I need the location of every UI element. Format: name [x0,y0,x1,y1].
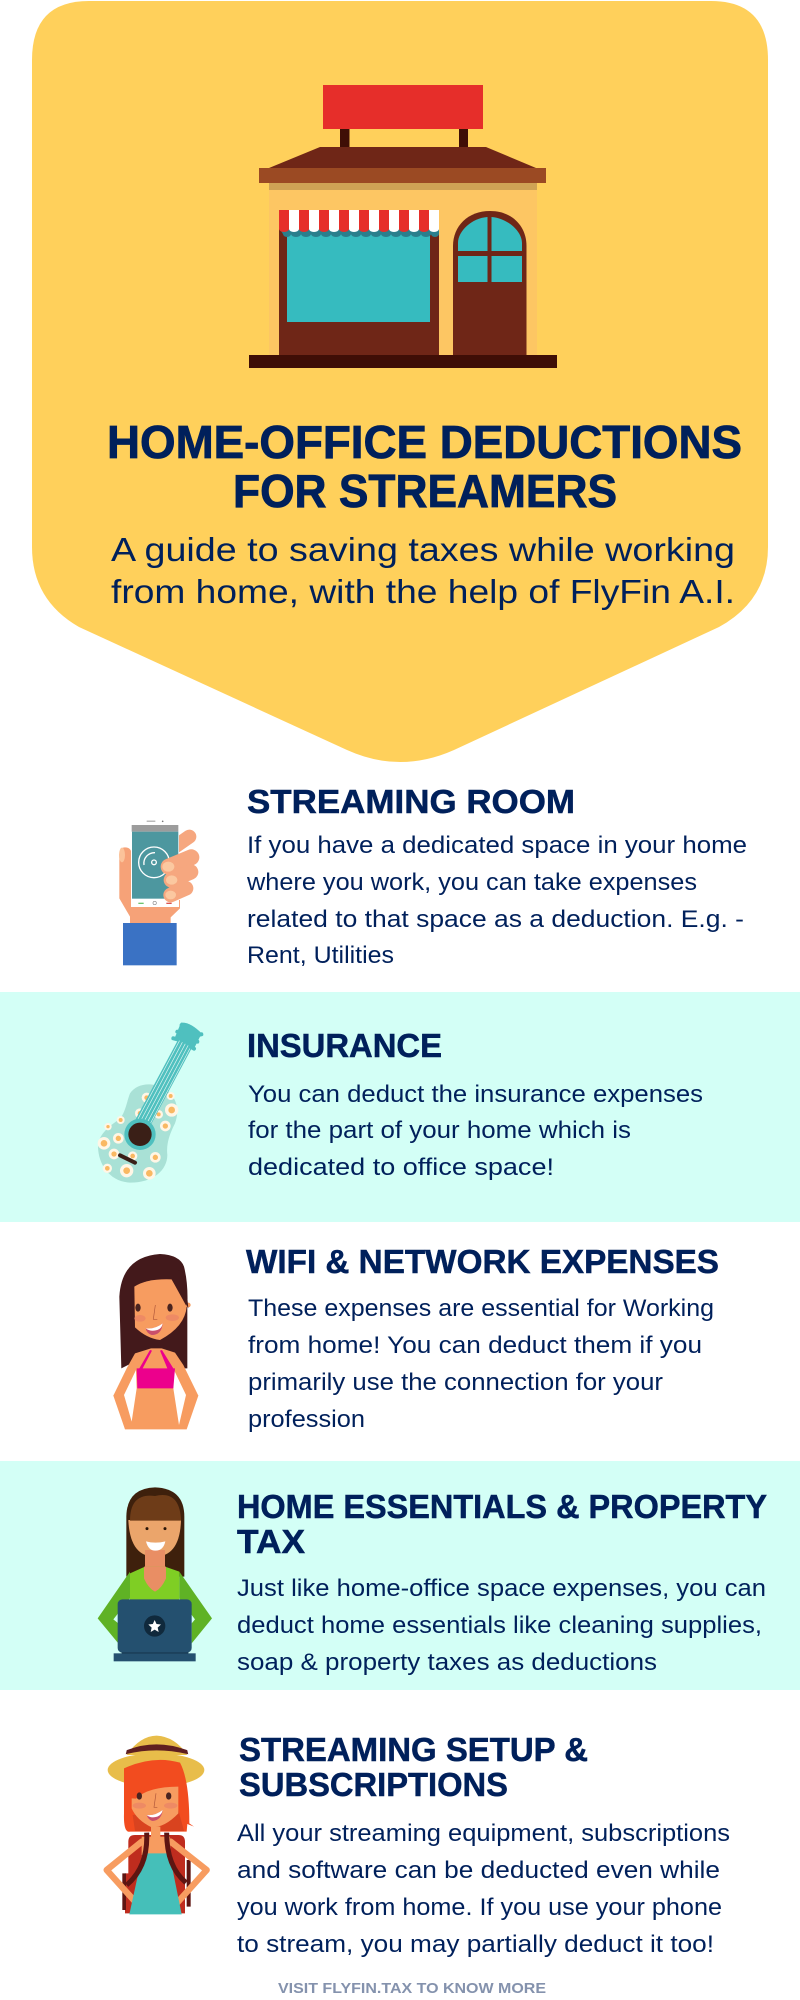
guitar body [98,1084,177,1183]
sound hole [124,1119,156,1150]
heading: home essentials [237,1488,767,1560]
ear [186,1303,191,1307]
text: wifi: from home! You can deduct them if you [248,1332,702,1359]
phone [131,818,179,907]
text: insurance [248,1081,703,1181]
heading: streaming setup [239,1731,588,1803]
window glass [287,232,430,322]
face [134,1279,187,1340]
panel: insurance band [0,992,800,1222]
icon: woman with hat and backpack [107,1736,207,1914]
hair back [126,1487,184,1577]
text: home essentials: deduct home essentials like cleaning supplies, [237,1612,762,1639]
face [128,1520,181,1557]
tuners [173,1025,201,1049]
text: streaming room [246,832,747,969]
heading: streaming setup: SUBSCRIPTIONS [239,1766,508,1803]
headstock [175,1023,202,1049]
sign posts [340,129,468,147]
text: streaming setup: All your streaming equipment, subscriptions [237,1820,730,1847]
pink top [137,1350,175,1388]
arm gaps [124,1370,186,1425]
sleeves [98,1572,212,1643]
strings [136,1036,193,1128]
text: streaming setup: you work from home. If you use your phone [237,1894,722,1921]
awning [279,210,439,237]
icon: woman in pink top [113,1254,198,1429]
far finger [175,837,189,847]
facial features [133,1792,177,1821]
hand [119,847,180,924]
subtitle [111,531,735,610]
backpack [125,1835,185,1913]
shirt [130,1567,179,1602]
neck [151,1827,160,1857]
flowers [98,1092,178,1180]
sleeve [123,923,177,965]
shoulders and arms [107,1842,207,1903]
wall shadow [269,183,537,190]
roof [269,147,536,168]
straps [127,1833,186,1885]
face [132,1787,178,1827]
text: home essentials [237,1575,766,1676]
footer: VISIT FLYFIN.TAX TO KNOW MORE [278,1980,546,1997]
panel: home essentials band [0,1461,800,1690]
fascia [259,168,546,183]
hair [119,1254,188,1368]
base step [249,355,557,368]
thumb tip [119,848,125,862]
door glass [458,217,522,282]
title: FOR STREAMERS [233,465,617,517]
text: wifi: primarily use the connection for your [248,1369,663,1396]
icon: storefront [249,85,557,368]
text: insurance: for the part of your home which is [248,1117,631,1144]
facial features [134,1304,179,1335]
hair shadow [133,1810,184,1831]
panel: yellow header shape [32,1,768,762]
text: streaming room: Rent, Utilities [247,942,394,969]
hat [108,1736,204,1787]
fringe [130,1495,181,1521]
text: home essentials: Just like home-office space expenses, you can [237,1575,766,1602]
facial features [145,1527,166,1551]
heading: streaming room: STREAMING ROOM [247,783,575,820]
icon: hand holding phone [119,818,191,965]
text: wifi: These expenses are essential for Working [248,1295,714,1322]
text: streaming setup [237,1820,730,1958]
heading: insurance: INSURANCE [247,1027,442,1064]
heading: wifi: WIFI & NETWORK EXPENSES [246,1243,719,1280]
heading: home essentials: TAX [237,1523,305,1560]
subtitle: from home, with the help of FlyFin A.I. [111,573,735,610]
text: streaming setup: and software can be deducted even while [237,1857,720,1884]
text: wifi: profession [248,1406,365,1433]
window frame [279,216,439,355]
text: streaming room: If you have a dedicated space in your home [247,832,747,859]
text: streaming setup: to stream, you may partially deduct it too! [237,1931,714,1958]
title [107,416,742,517]
bridge [120,1155,135,1163]
text: insurance: You can deduct the insurance expenses [248,1081,703,1108]
wall [269,183,537,355]
title: HOME-OFFICE DEDUCTIONS [107,416,742,468]
hair strand [172,1270,188,1308]
subtitle: A guide to saving taxes while working [111,531,735,568]
text: home essentials: soap & property taxes as deductions [237,1649,657,1676]
text: insurance: dedicated to office space! [248,1154,554,1181]
chest [142,1837,171,1855]
door [453,211,526,355]
icon: woman with laptop [98,1487,212,1661]
text: streaming room: related to that space as a deduction. E.g. - [247,906,744,933]
neckline [144,1567,166,1592]
sign [323,85,483,129]
fingers [162,857,191,899]
text: streaming room: where you work, you can take expenses [246,869,697,896]
icon: guitar [98,1023,202,1183]
neck [142,1039,187,1125]
neck [145,1550,165,1570]
pack side [122,1860,191,1910]
body [113,1348,198,1429]
text: wifi [248,1295,714,1433]
heading: streaming setup: STREAMING SETUP & [239,1731,588,1768]
laptop [114,1599,196,1661]
teal top [129,1853,182,1914]
hair [124,1760,194,1832]
heading: home essentials: HOME ESSENTIALS & PROPERTY [237,1488,767,1525]
